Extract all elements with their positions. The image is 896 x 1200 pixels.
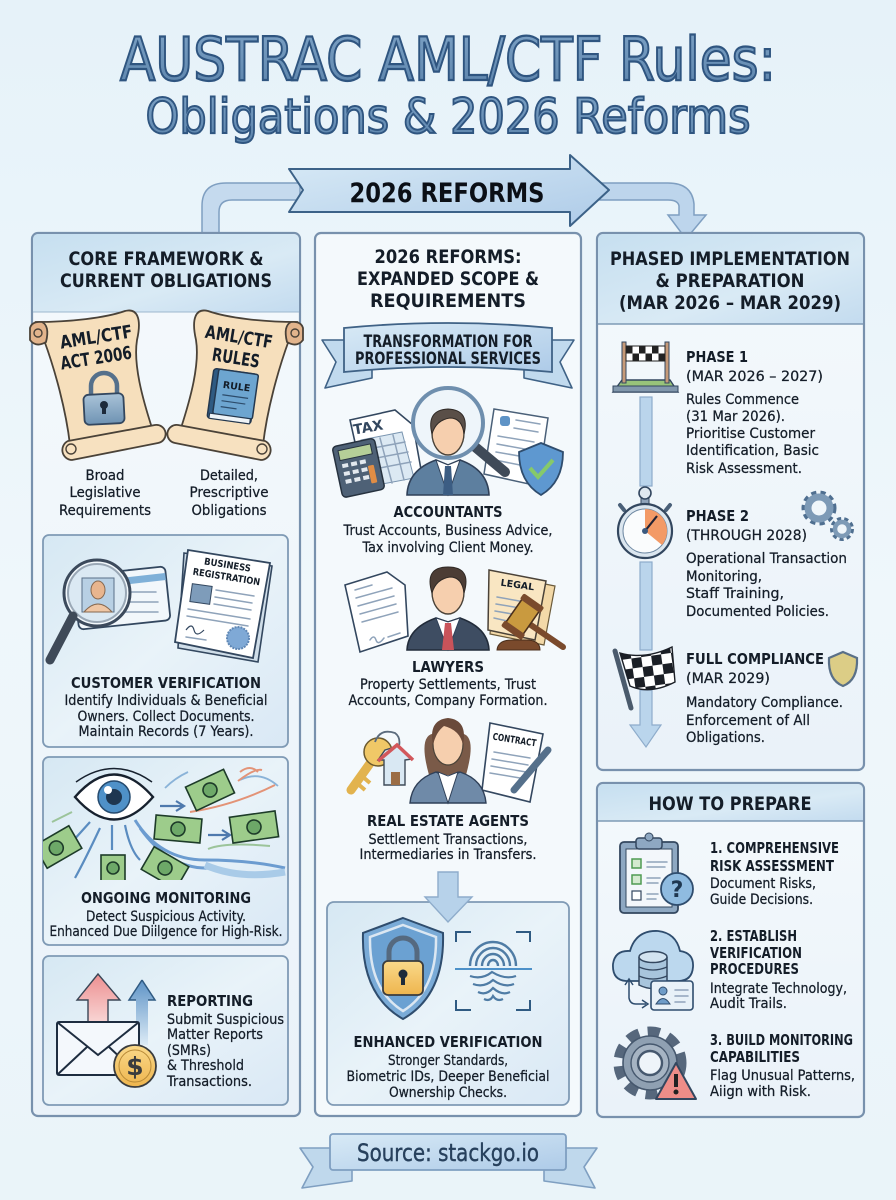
- text: lawyers: LAWYERS: [412, 658, 484, 676]
- text: phase 2: Documented Policies.: [686, 604, 829, 620]
- text: phase 2: Operational Transaction: [686, 551, 847, 567]
- ribbon: transformation for professional services: TRANSFORMATION FOR: [364, 332, 533, 351]
- text: accountants: Trust Accounts, Business Advice,: [343, 523, 552, 539]
- text: build monitoring capabilities: [710, 1031, 855, 1100]
- text: ongoing monitoring: Enhanced Due Diilgence for High-Risk.: [50, 924, 282, 940]
- sub-panel: enhanced verification: [327, 872, 569, 1105]
- text: real estate agents: REAL ESTATE AGENTS: [367, 812, 529, 830]
- heading: phased implementation: (MAR 2026 – MAR 2029): [619, 292, 841, 314]
- icon: lawyer with legal documents and gavel: [345, 567, 563, 652]
- scroll captions: Detailed,: [200, 468, 258, 484]
- text: comprehensive risk assessment: [710, 839, 839, 908]
- panel: 2026 reforms scope: [315, 233, 581, 1116]
- icon: accountant with tax documents, calculator and shield: TAX: [352, 418, 385, 439]
- icon: fingerprint scan: [455, 932, 532, 1010]
- icon: gear with warning triangle: [619, 1032, 696, 1099]
- icon: envelope with arrows and coin: [57, 974, 156, 1087]
- text: phase 1: Rules Commence: [686, 392, 799, 408]
- text: comprehensive risk assessment: RISK ASSESSMENT: [710, 857, 834, 875]
- arrow: down into enhanced verification: [425, 872, 472, 922]
- text: lawyers: Accounts, Company Formation.: [348, 693, 548, 709]
- text: phase 2: [686, 507, 847, 620]
- icon: cloud database and ID card: [613, 931, 693, 1010]
- text: comprehensive risk assessment: Document Risks,: [710, 876, 816, 892]
- text: establish verification procedures: VERIFICATION: [710, 944, 802, 962]
- scroll: AML/CTF Act 2006: AML/CTF: [58, 321, 134, 354]
- text: enhanced verification: Biometric IDs, Deeper Beneficial: [346, 1069, 550, 1085]
- text: customer verification: Owners. Collect Documents.: [78, 709, 254, 725]
- text: ongoing monitoring: [50, 889, 282, 940]
- text: establish verification procedures: PROCEDURES: [710, 960, 799, 978]
- scroll captions: Obligations: [192, 503, 266, 519]
- icon: business registration document: BUSINESS: [203, 556, 252, 575]
- text: customer verification: Identify Individuals & Beneficial: [64, 693, 268, 709]
- text: real estate agents: Settlement Transactions,: [368, 832, 528, 848]
- icon: business registration document: [175, 550, 272, 662]
- text: enhanced verification: [346, 1033, 550, 1101]
- title: AUSTRAC AML/CTF Rules:: [120, 25, 776, 95]
- text: ongoing monitoring: Detect Suspicious Activity.: [86, 909, 246, 925]
- timeline arrow: [630, 397, 661, 747]
- heading: phased implementation: PHASED IMPLEMENTATION: [610, 248, 850, 270]
- text: reporting: (SMRs): [167, 1043, 211, 1059]
- banner arrow: 2026 reforms: [289, 155, 609, 226]
- heading: expanded scope: REQUIREMENTS: [370, 290, 526, 312]
- heading: expanded scope: [357, 246, 539, 312]
- text: phase 1: (31 Mar 2026).: [686, 409, 785, 425]
- text: phase 1: PHASE 1: [686, 348, 748, 366]
- text: accountants: Tax involving Client Money.: [362, 540, 534, 556]
- heading: how to prepare: HOW TO PREPARE: [648, 793, 812, 815]
- text: phase 2: PHASE 2: [686, 507, 749, 525]
- icon: envelope with arrows and coin: $: [126, 1052, 144, 1081]
- icon: real estate agent with key, house and contract: CONTRACT: [492, 732, 537, 749]
- text: establish verification procedures: [710, 927, 847, 1012]
- heading: core framework: CORE FRAMEWORK &: [68, 248, 264, 270]
- text: build monitoring capabilities: CAPABILITIES: [710, 1048, 800, 1066]
- icon: gears: [804, 493, 852, 539]
- text: full compliance: Enforcement of All: [686, 713, 810, 729]
- heading: core framework: [60, 248, 272, 292]
- sub-panel: ongoing monitoring: [34, 757, 288, 945]
- scroll: AML/CTF Rules: RULES: [211, 344, 261, 373]
- connector arrow: left panel to reforms banner: [202, 183, 300, 233]
- icon: gold shield: [829, 652, 857, 686]
- title: Obligations & 2026 Reforms: [146, 89, 750, 145]
- text: full compliance: FULL COMPLIANCE: [686, 650, 824, 668]
- text: reporting: Transactions.: [166, 1074, 252, 1090]
- text: real estate agents: Intermediaries in Transfers.: [360, 847, 536, 863]
- text: reporting: REPORTING: [167, 992, 253, 1010]
- text: phase 1: (MAR 2026 – 2027): [686, 369, 823, 385]
- icon: real estate agent with key, house and contract: [351, 718, 548, 803]
- text: reporting: Submit Suspicious: [167, 1012, 284, 1028]
- text: full compliance: Obligations.: [686, 730, 765, 746]
- text: full compliance: Mandatory Compliance.: [686, 695, 843, 711]
- scroll captions: Broad: [86, 468, 124, 484]
- icon: ID card under magnifier: [50, 560, 171, 660]
- text: lawyers: Property Settlements, Trust: [360, 677, 536, 693]
- panel: how to prepare: [597, 783, 864, 1117]
- icon: start gate: [613, 342, 678, 392]
- icon: checkered flag: [615, 647, 675, 708]
- heading: core framework: CURRENT OBLIGATIONS: [60, 270, 272, 292]
- scroll: AML/CTF Rules: AML/CTF: [204, 322, 274, 353]
- text: customer verification: CUSTOMER VERIFICATION: [71, 674, 261, 692]
- text: full compliance: (MAR 2029): [686, 671, 770, 687]
- scroll: AML/CTF Act 2006: ACT 2006: [59, 343, 133, 375]
- text: establish verification procedures: Audit Trails.: [710, 996, 787, 1012]
- text: customer verification: [64, 674, 268, 740]
- banner arrow: 2026 reforms: 2026 REFORMS: [350, 178, 544, 209]
- text: reporting: Matter Reports: [167, 1027, 263, 1043]
- footer ribbon: source: [300, 1134, 597, 1188]
- heading: phased implementation: [610, 248, 850, 314]
- text: real estate agents: [360, 812, 536, 863]
- text: phase 1: Risk Assessment.: [686, 461, 802, 477]
- sub-panel: reporting: [43, 956, 288, 1105]
- text: ongoing monitoring: ONGOING MONITORING: [81, 889, 251, 907]
- text: accountants: ACCOUNTANTS: [394, 503, 502, 521]
- icon: clipboard with question mark: ?: [671, 878, 683, 903]
- text: enhanced verification: ENHANCED VERIFICATION: [354, 1033, 542, 1051]
- text: build monitoring capabilities: Aiign with Risk.: [710, 1084, 811, 1100]
- scroll: AML/CTF Act 2006: [30, 310, 166, 460]
- text: phase 2: Monitoring,: [686, 569, 762, 585]
- scroll: AML/CTF Rules: [167, 310, 303, 460]
- text: phase 2: (THROUGH 2028): [686, 528, 807, 544]
- illustration: eye watching money flows: [34, 768, 285, 889]
- footer ribbon: source: Source: stackgo.io: [357, 1139, 539, 1167]
- text: enhanced verification: Stronger Standards,: [388, 1053, 508, 1069]
- ribbon: transformation for professional services: PROFESSIONAL SERVICES: [355, 349, 541, 368]
- scroll captions: Prescriptive: [190, 485, 268, 501]
- text: customer verification: Maintain Records (7 Years).: [78, 724, 254, 740]
- title: [120, 25, 776, 145]
- ribbon: transformation for professional services: [322, 323, 574, 388]
- icon: accountant with tax documents, calculator and shield: [332, 388, 563, 498]
- sub-panel: customer verification: [43, 535, 288, 747]
- text: phase 1: Prioritise Customer: [686, 426, 815, 442]
- text: reporting: [166, 992, 284, 1090]
- scroll: AML/CTF Rules: RULE: [222, 380, 251, 395]
- text: establish verification procedures: Integrate Technology,: [710, 981, 847, 997]
- heading: expanded scope: 2026 REFORMS:: [374, 246, 522, 268]
- text: comprehensive risk assessment: Guide Decisions.: [710, 892, 813, 908]
- scroll captions: Legislative: [70, 485, 140, 501]
- text: phase 2: Staff Training,: [686, 586, 784, 602]
- text: establish verification procedures: 2. ESTABLISH: [710, 927, 797, 945]
- icon: lawyer with legal documents and gavel: LEGAL: [500, 578, 535, 593]
- text: reporting: & Threshold: [167, 1058, 244, 1074]
- text: enhanced verification: Ownership Checks.: [389, 1085, 507, 1101]
- text: phase 1: [686, 348, 823, 477]
- icon: stopwatch: [618, 487, 672, 558]
- heading: phased implementation: & PREPARATION: [656, 270, 804, 292]
- icon: shield with padlock: [363, 918, 443, 1019]
- heading: expanded scope: EXPANDED SCOPE &: [357, 268, 539, 290]
- text: comprehensive risk assessment: 1. COMPREHENSIVE: [710, 839, 839, 857]
- text: accountants: [343, 503, 552, 556]
- text: phase 1: Identification, Basic: [686, 443, 819, 459]
- text: full compliance: [686, 650, 843, 746]
- panel: core framework: [30, 233, 303, 1116]
- text: build monitoring capabilities: Flag Unusual Patterns,: [710, 1068, 855, 1084]
- panel: phased implementation: [597, 233, 864, 770]
- connector arrow: reforms banner to right panel: [600, 183, 706, 239]
- icon: business registration document: REGISTRATION: [192, 567, 261, 588]
- text: lawyers: [348, 658, 548, 709]
- icon: clipboard with question mark: [620, 833, 693, 913]
- scroll captions: [59, 468, 268, 519]
- scroll captions: Requirements: [59, 503, 151, 519]
